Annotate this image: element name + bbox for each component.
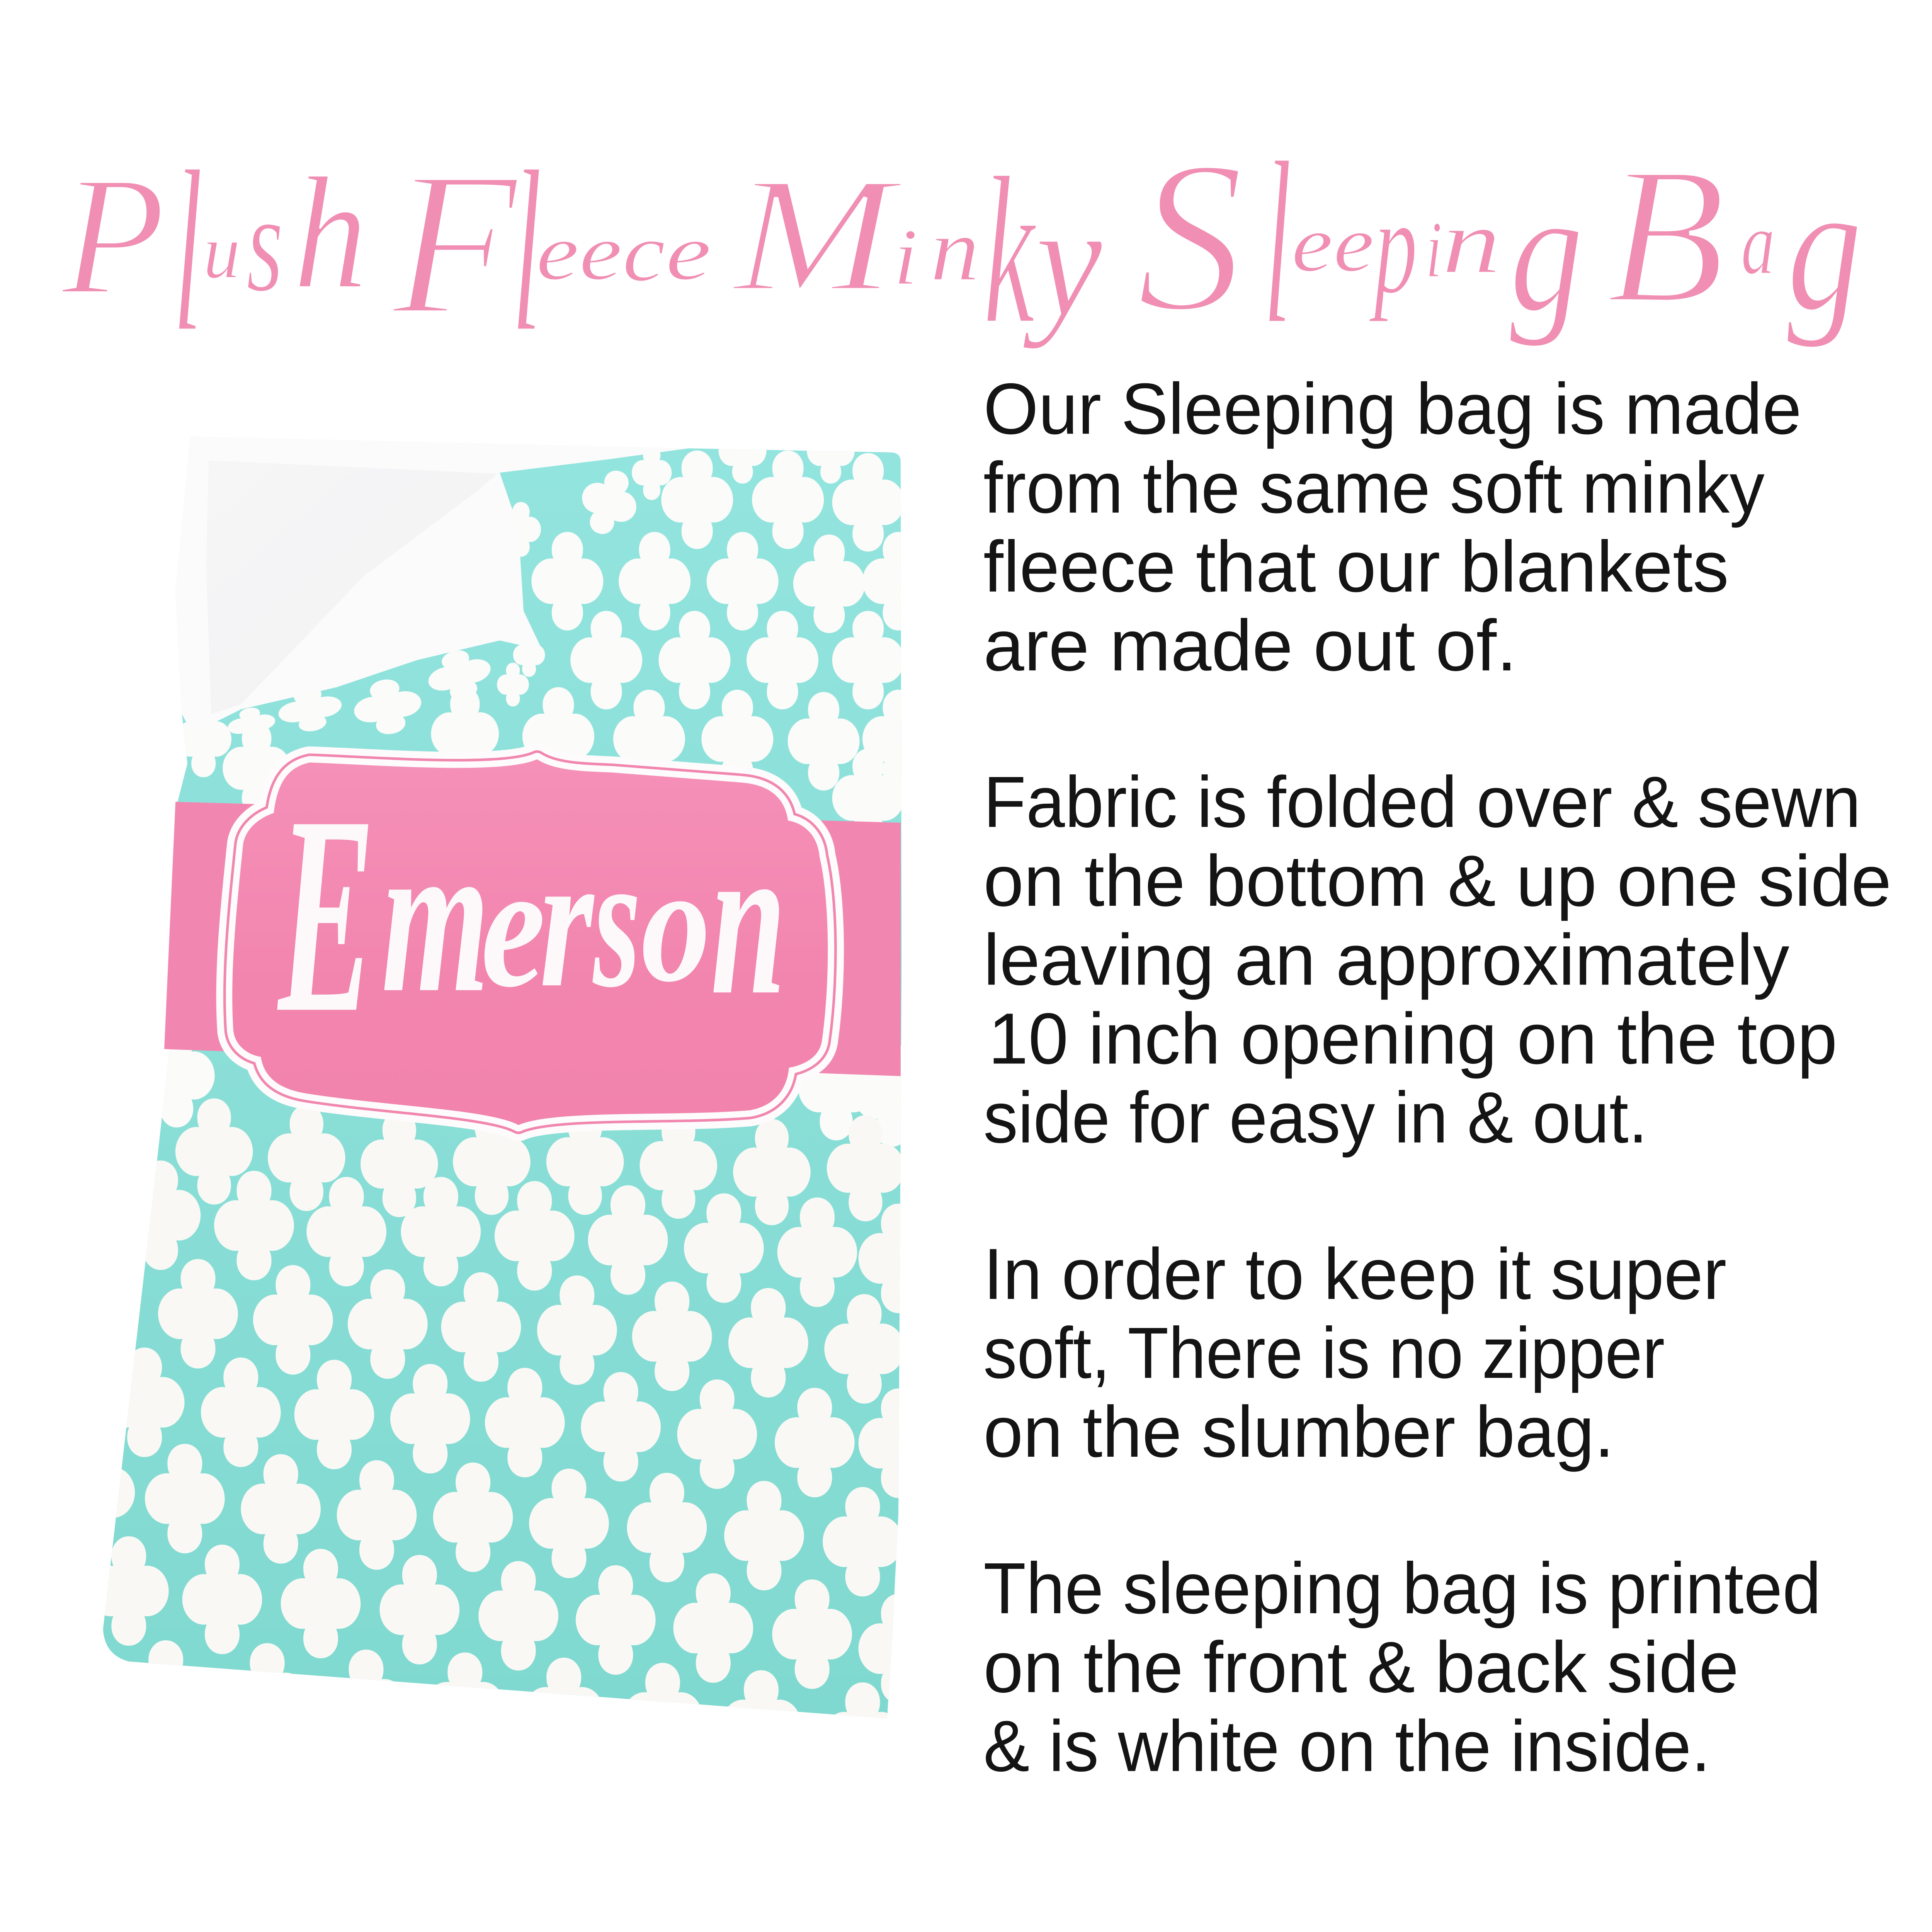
title word: Sleeping: g [1510, 155, 1583, 348]
title word: Minky: n [930, 199, 980, 299]
title word: Sleeping: e [1291, 199, 1333, 288]
paragraph: material [983, 368, 1801, 686]
title word: Minky: y [1021, 172, 1104, 350]
name: Emerson: E [276, 757, 375, 1071]
paragraph: printing [983, 1548, 1821, 1786]
title word: Sleeping: p [1369, 169, 1417, 323]
name: Emerson: e [481, 828, 545, 1024]
paragraph: printing: on the front & back side [983, 1626, 1739, 1708]
title word: Plush: l [173, 123, 203, 381]
paragraph: no zipper [983, 1233, 1726, 1472]
title word: Bag: g [1787, 146, 1862, 349]
paragraph: construction: leaving an approximately [983, 919, 1789, 1000]
title word: Sleeping: l [1263, 112, 1292, 373]
title word: Fleece [389, 122, 711, 381]
name: Emerson: n [711, 797, 786, 1040]
title word: Plush: u [203, 209, 240, 294]
quatrefoil pattern [55, 418, 938, 1792]
title word: Plush: h [293, 144, 367, 322]
name: Emerson: o [641, 832, 710, 1017]
title word: Sleeping: i [1426, 205, 1442, 294]
title [59, 112, 1862, 381]
paragraph: no zipper: In order to keep it super [983, 1233, 1726, 1315]
title word: Plush: P [59, 141, 166, 330]
title word: Fleece: c [622, 206, 665, 299]
paragraph: construction: on the bottom & up one side [983, 840, 1891, 921]
name: Emerson: r [540, 813, 596, 1027]
name: Emerson: m [382, 795, 489, 1038]
title word: Sleeping: S [1136, 116, 1244, 357]
plaque pink outline [232, 759, 828, 1125]
title word: Bag: B [1606, 126, 1726, 344]
description text [983, 368, 1891, 1786]
title word: Minky: k [983, 133, 1038, 368]
blanket illustration [103, 448, 902, 1719]
paragraph: material: Our Sleeping bag is made [983, 368, 1801, 449]
title word: Plush: s [247, 164, 283, 321]
title word: Plush [59, 123, 367, 381]
title word: Bag [1606, 126, 1862, 349]
paragraph: printing: The sleeping bag is printed [983, 1548, 1821, 1629]
paragraph: printing: & is white on the inside. [983, 1705, 1711, 1786]
paragraph: no zipper: soft, There is no zipper [983, 1312, 1665, 1393]
paragraph: construction: 10 inch opening on the top [988, 998, 1837, 1079]
title word: Sleeping [1136, 112, 1583, 373]
name: Emerson: s [591, 813, 641, 1027]
paragraph: construction [983, 761, 1891, 1158]
title word: Minky [730, 133, 1104, 368]
title word: Fleece: F [389, 129, 520, 357]
title word: Fleece: e [665, 207, 711, 297]
paragraph: material: from the same soft minky [983, 447, 1765, 528]
paragraph: material: are made out of. [983, 605, 1517, 686]
title word: Minky: i [893, 213, 918, 301]
paragraph: material: fleece that our blankets [983, 526, 1729, 607]
title word: Sleeping: e [1333, 199, 1374, 289]
pink band [164, 802, 901, 1076]
plaque inner gap [232, 759, 828, 1125]
title word: Fleece: l [511, 122, 542, 381]
folded white inner lining [175, 436, 689, 734]
paragraph: construction: Fabric is folded over & sewn [983, 761, 1861, 842]
paragraph: no zipper: on the slumber bag. [983, 1391, 1614, 1472]
title word: Fleece: e [579, 207, 622, 297]
plaque white frame [232, 759, 828, 1125]
paragraph: construction: side for easy in & out. [983, 1077, 1648, 1158]
blanket body [103, 438, 901, 1719]
plaque fill [232, 759, 828, 1125]
title word: Minky: M [730, 144, 905, 326]
inner back panel [206, 461, 497, 714]
white hem and flap [175, 436, 689, 734]
name plaque [232, 759, 828, 1125]
name: Emerson [276, 757, 786, 1071]
title word: Fleece: e [536, 207, 579, 297]
title word: Sleeping: n [1442, 191, 1501, 293]
title word: Bag: a [1741, 193, 1775, 293]
